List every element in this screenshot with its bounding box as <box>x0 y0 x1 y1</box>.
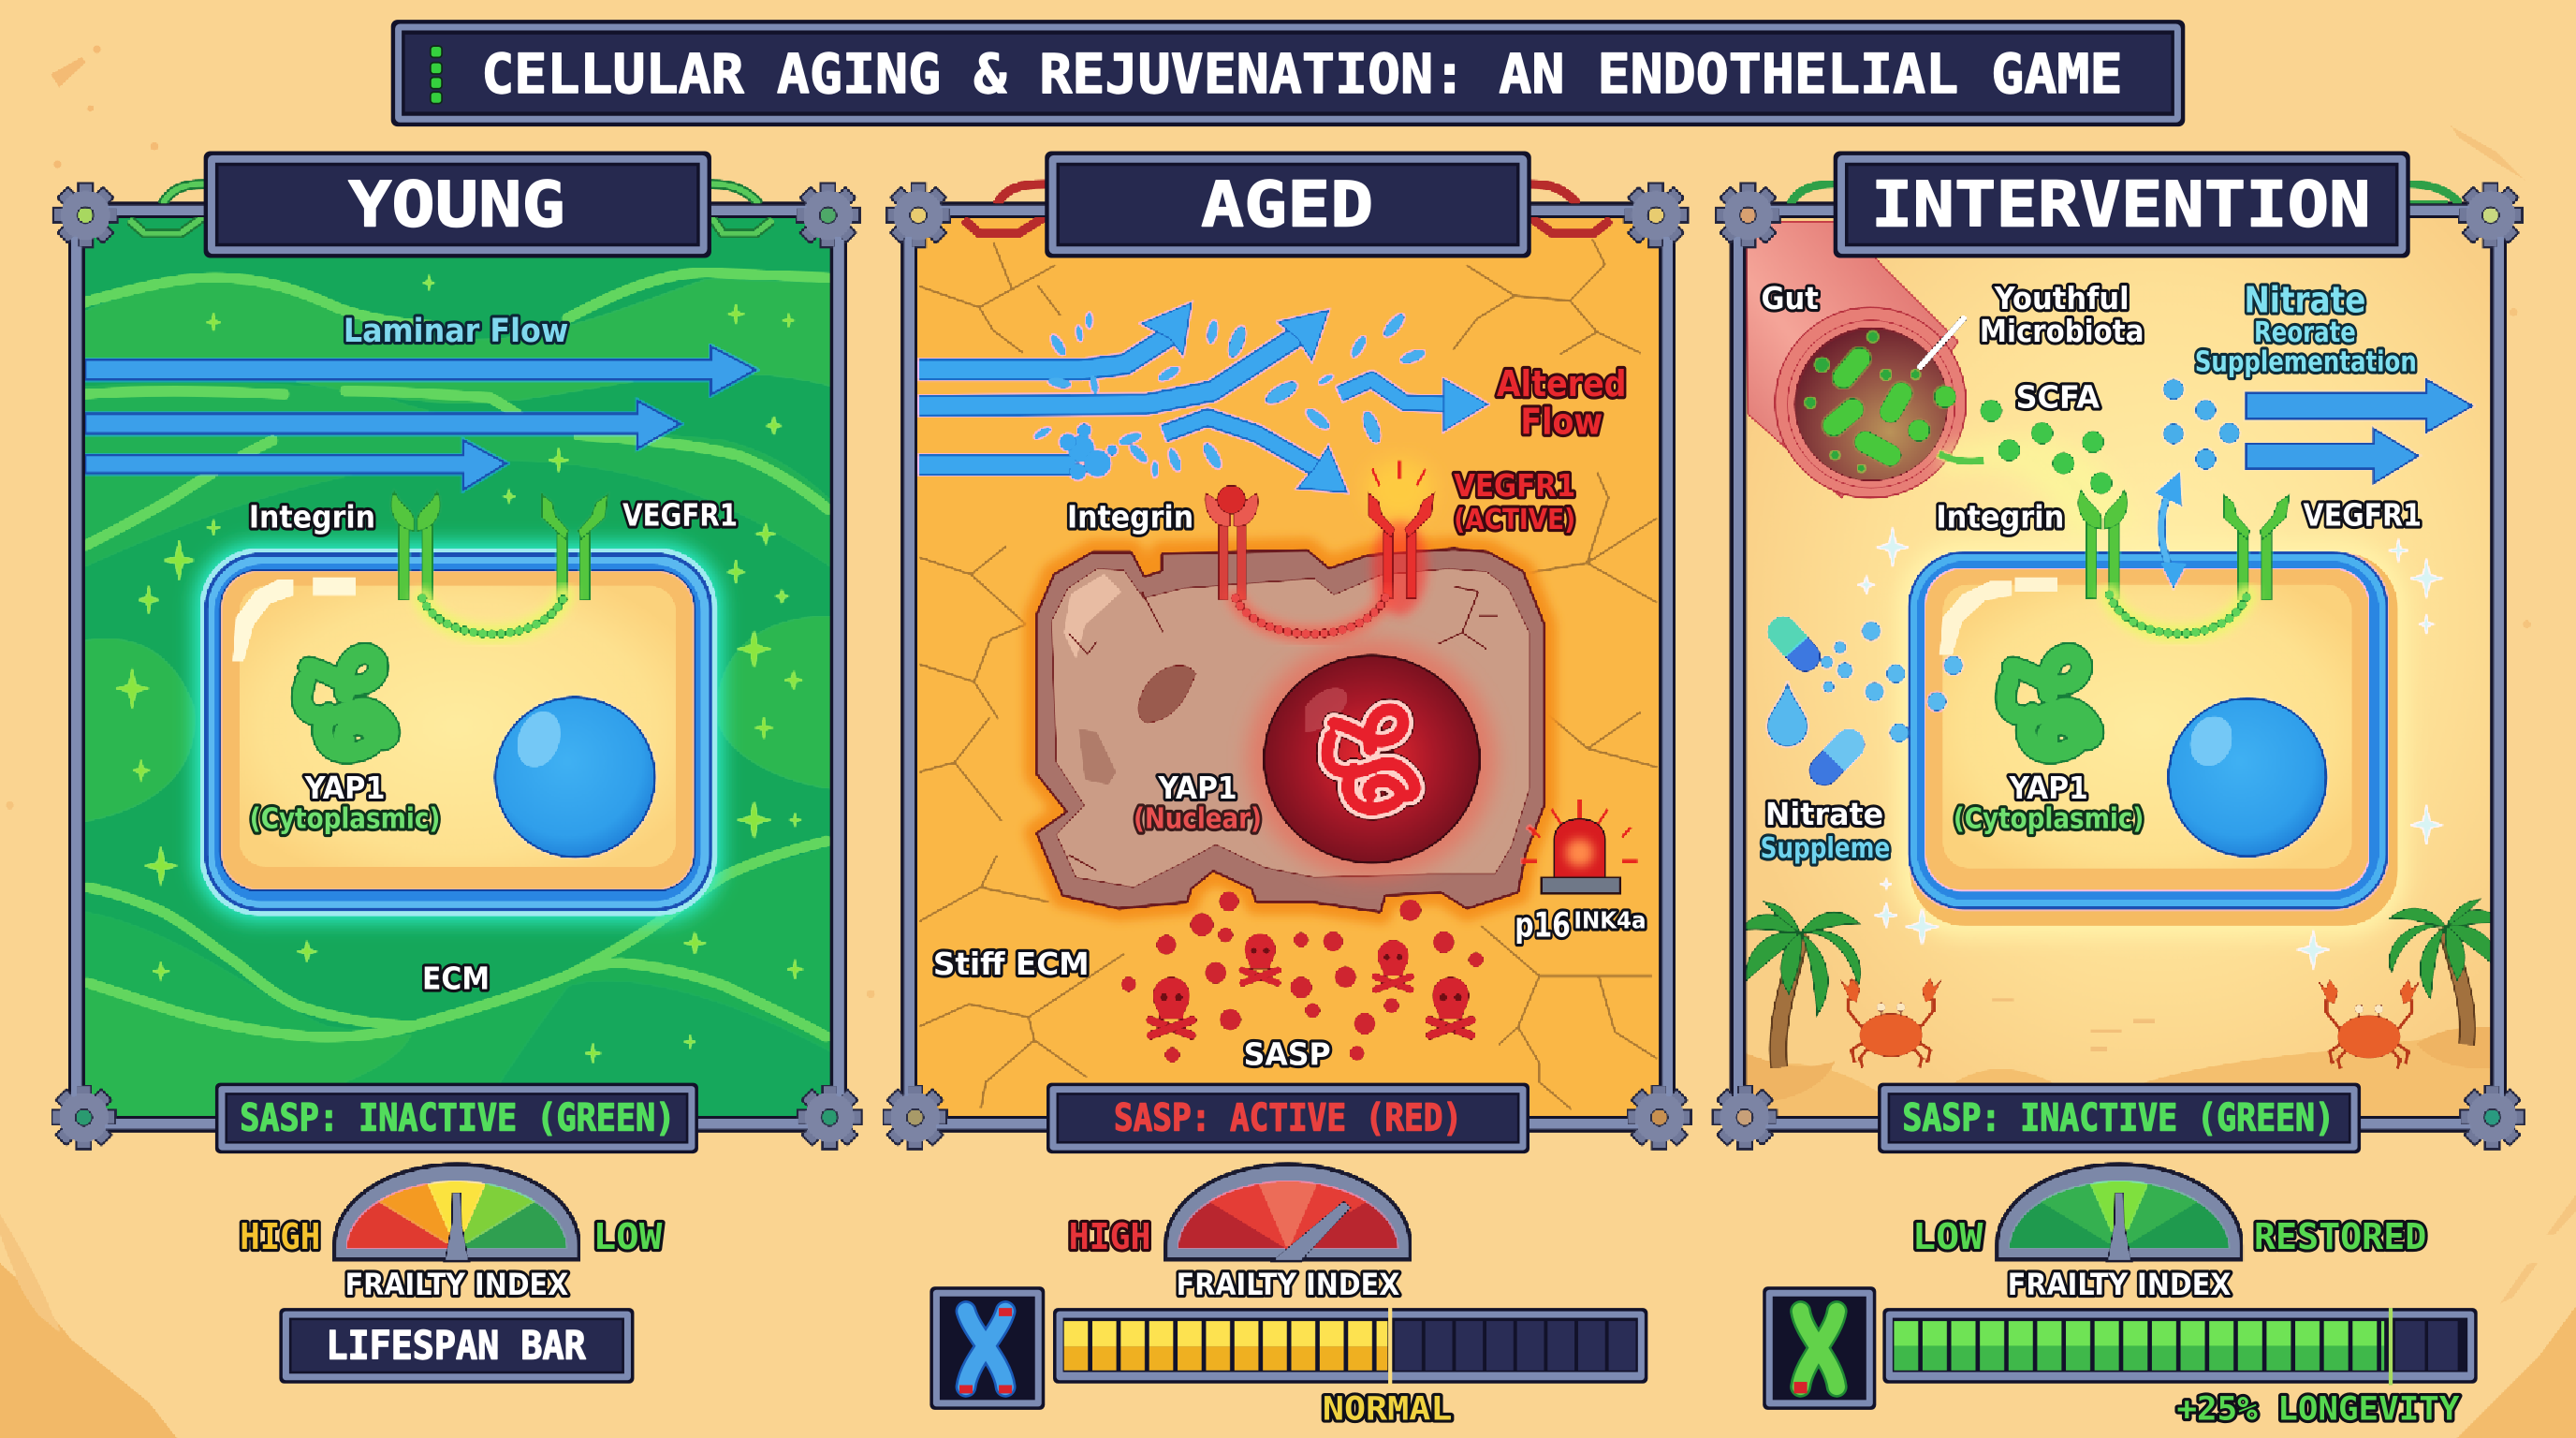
young scene <box>84 217 831 1117</box>
label: YAP1: YAP1 <box>1157 770 1237 806</box>
label: cytoplasmic: (Cytoplasmic) <box>250 803 440 836</box>
icon: YAP1 nuclear <box>1327 710 1414 809</box>
altered flow arrows <box>918 303 1487 492</box>
label: SASP: SASP <box>1244 1035 1331 1072</box>
icon: gut tube <box>1747 222 1966 498</box>
intervention beach background <box>1745 217 2494 1117</box>
label: stiff ECM: Stiff ECM <box>933 946 1090 982</box>
heading: intervention <box>1834 151 2410 258</box>
chain linking receptors <box>422 594 565 634</box>
supplements: pills and droplets <box>1763 611 1962 791</box>
VEGFR1 receptor <box>542 494 607 600</box>
VEGFR1: red active <box>1367 460 1434 616</box>
laminar flow arrows <box>85 346 755 490</box>
status: SASP inactive: SASP: INACTIVE (GREEN) <box>240 1096 675 1140</box>
cell: senescent <box>1036 549 1544 912</box>
heading: young: YOUNG <box>348 168 565 241</box>
aged cracked background <box>916 217 1661 1116</box>
label: longevity: +25% LONGEVITY <box>2177 1389 2459 1428</box>
panel: intervention <box>1714 151 2524 1428</box>
label: nitrate supplement: Nitrate <box>1765 796 1883 832</box>
label: integrin: Integrin <box>1067 498 1193 535</box>
label: low: LOW <box>1912 1216 1983 1258</box>
nucleus <box>2169 698 2326 856</box>
cell: restored <box>1897 542 2407 936</box>
heading: young <box>204 151 711 258</box>
icon: palm right <box>2389 900 2502 1046</box>
status: SASP active: SASP: ACTIVE (RED) <box>1114 1096 1462 1140</box>
label: p16 INK4a: INK4a <box>1573 907 1647 934</box>
frame with gears <box>52 184 861 1149</box>
title text: CELLULAR AGING & REJUVENATION: AN ENDOTHELIAL GAME <box>481 42 2123 106</box>
nitrate particles <box>2163 379 2239 469</box>
label: altered: Altered <box>1497 363 1627 405</box>
intervention scene <box>1741 217 2502 1117</box>
label: gut: Gut <box>1761 280 1819 316</box>
label: microbiota: Microbiota <box>1980 313 2144 349</box>
label: nitrate: Nitrate <box>2244 279 2365 321</box>
heading: intervention: INTERVENTION <box>1871 168 2371 241</box>
lifespan bar label <box>279 1308 634 1384</box>
nucleus: inflamed <box>1247 639 1497 879</box>
integrin receptor <box>2079 490 2128 598</box>
icon: crab left <box>1840 977 1942 1068</box>
label: nuclear: (Nuclear) <box>1134 803 1262 836</box>
label: p16 INK4a <box>1515 904 1647 945</box>
panel: aged <box>884 151 1690 1428</box>
label: VEGFR1 active: VEGFR1 <box>1454 467 1575 504</box>
integrin receptor <box>391 492 440 600</box>
icon: YAP1 protein <box>302 653 389 753</box>
SCFA particles <box>1939 400 2136 542</box>
icon: palm left <box>1741 902 1861 1068</box>
nucleus <box>495 697 654 857</box>
status: SASP inactive: SASP: INACTIVE (GREEN) <box>1902 1096 2334 1140</box>
label: YAP1: YAP1 <box>2009 770 2088 806</box>
label: laminar flow: Laminar Flow <box>344 312 568 350</box>
status: SASP inactive <box>215 1083 698 1153</box>
gauge: frailty young <box>335 1165 578 1260</box>
frame with gears <box>884 184 1690 1149</box>
nitrate flow arrows <box>2246 379 2472 483</box>
gauge: frailty aged <box>1166 1165 1410 1260</box>
icon: chromosome aged <box>929 1286 1045 1410</box>
aged scene <box>916 217 1661 1116</box>
label: frailty index: FRAILTY INDEX <box>1177 1269 1399 1302</box>
label: p16 INK4a: p16 <box>1515 904 1571 945</box>
label: cytoplasmic: (Cytoplasmic) <box>1954 803 2144 836</box>
gut pointer <box>1919 317 1965 368</box>
VEGFR1 receptor <box>2224 494 2290 600</box>
panel: young <box>52 151 861 1384</box>
young background <box>84 217 831 1117</box>
gauge: frailty restored <box>1998 1165 2241 1260</box>
label: high: HIGH <box>240 1216 320 1258</box>
label: high: HIGH <box>1069 1216 1150 1258</box>
label: supplementation: Supplementation <box>2195 346 2417 379</box>
cell: healthy <box>196 544 721 920</box>
label: VEGFR1: VEGFR1 <box>622 497 738 534</box>
label: suppleme: Suppleme <box>1761 832 1890 865</box>
sparkles <box>1857 527 2443 970</box>
integrin: red <box>1206 486 1258 600</box>
label: ECM: ECM <box>422 961 490 997</box>
label: integrin: Integrin <box>1936 498 2064 535</box>
icon: crab right <box>2318 979 2420 1070</box>
icon: chromosome restored <box>1763 1286 1876 1410</box>
label: youthful: Youthful <box>1994 280 2130 316</box>
heading: aged <box>1045 151 1531 258</box>
label: SCFA: SCFA <box>2016 378 2100 415</box>
label: integrin: Integrin <box>249 498 375 535</box>
label: flow: Flow <box>1520 401 1603 443</box>
label: reorate: Reorate <box>2254 316 2356 349</box>
recycling arrow <box>2156 472 2187 588</box>
label: frailty index: FRAILTY INDEX <box>2008 1269 2231 1302</box>
icon: YAP1 protein <box>2006 653 2093 753</box>
frame with gears <box>1714 184 2524 1149</box>
label: active: (ACTIVE) <box>1454 504 1575 536</box>
label: frailty index: FRAILTY INDEX <box>345 1269 568 1302</box>
status: SASP inactive <box>1878 1083 2361 1153</box>
status lights <box>431 46 442 104</box>
SASP skulls and particles <box>1121 891 1484 1063</box>
sparkles <box>116 274 803 1064</box>
status: SASP active <box>1046 1083 1530 1153</box>
label: VEGFR1: VEGFR1 <box>2304 497 2422 534</box>
chain linking receptors <box>2110 594 2247 634</box>
lifespan bar: aged <box>1053 1308 1647 1386</box>
label: low: LOW <box>593 1216 663 1258</box>
lifespan bar: extended <box>1882 1308 2478 1386</box>
chain: red <box>1236 594 1386 634</box>
heading: aged: AGED <box>1201 168 1373 241</box>
label: normal: NORMAL <box>1323 1389 1453 1428</box>
label: YAP1: YAP1 <box>304 770 386 806</box>
label: restored: RESTORED <box>2254 1216 2426 1258</box>
lifespan bar label: LIFESPAN BAR <box>326 1322 586 1368</box>
title banner <box>391 20 2185 126</box>
bacteria <box>1819 344 1955 470</box>
icon: alarm p16 <box>1521 799 1638 894</box>
